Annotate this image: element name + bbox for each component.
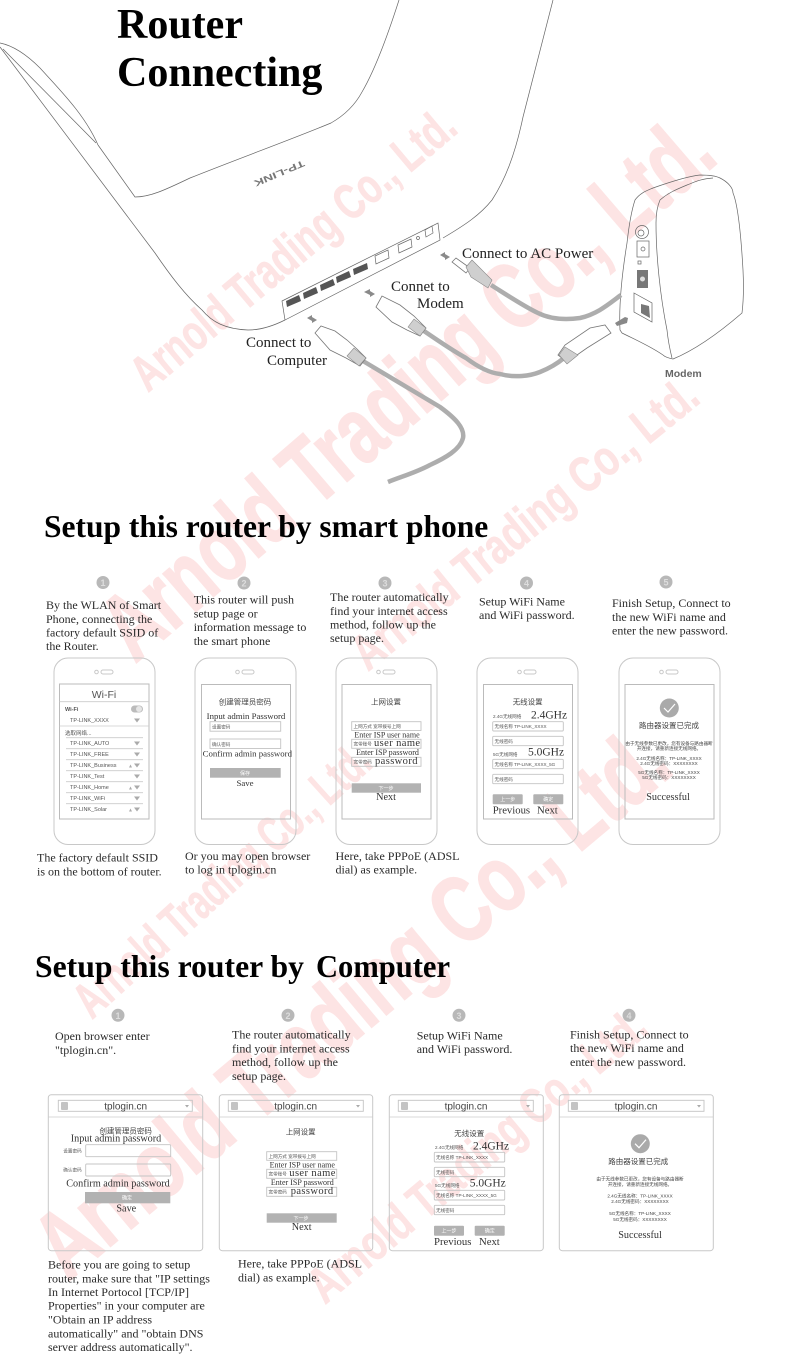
browser window 2: internet setup: tplogin.cn (274, 1102, 317, 1112)
browser window 1: admin password (48, 1095, 203, 1251)
browser window 2: internet setup: 宽带账号 (268, 1170, 287, 1178)
heading: smart phone setup: Setup this router by smart phone (44, 509, 488, 544)
step numbers: computer (112, 1009, 636, 1022)
notes below phones: dial) as example. (336, 863, 417, 877)
browser window 4: setup complete: 2.4G无线密码：XXXXXXXX (611, 1198, 669, 1205)
title: Connecting (117, 50, 322, 96)
browser window 1: admin password: Input admin password (71, 1134, 161, 1145)
step descriptions: phone: the smart phone (194, 634, 270, 648)
phone 4: wireless setup: 确定 (543, 796, 553, 803)
phone 5: setup complete: Successful (646, 792, 690, 803)
phone 1: Wi-Fi list (54, 658, 155, 844)
modem cable and plugs (364, 289, 628, 376)
notes below windows: Properties" in your computer are (48, 1299, 205, 1313)
phone 1: Wi-Fi list: Wi-Fi (65, 707, 79, 713)
browser window 2: internet setup: Next (292, 1222, 312, 1233)
browser window 4: setup complete: 开连接，请重新连接无线网络。 (608, 1181, 672, 1188)
browser window 4: setup complete: 5G无线密码：XXXXXXXX (613, 1216, 667, 1223)
step descriptions: phone: find your internet access (330, 604, 448, 618)
browser window 2: internet setup: Enter ISP user name (270, 1161, 335, 1170)
step descriptions: phone: Phone, connecting the (46, 612, 152, 626)
phone 4: wireless setup: Previous (493, 805, 530, 817)
browser window 1: admin password: 确定 (122, 1194, 132, 1202)
cable labels: Connect to (246, 335, 311, 351)
phone 5: setup complete: 开连接，请重新连接无线网络。 (637, 745, 701, 752)
phone 3: internet setup: 上网设置 (371, 696, 401, 706)
step descriptions: computer: setup page. (232, 1069, 286, 1083)
title (117, 2, 322, 96)
modem caption: Modem (665, 368, 702, 380)
browser window 3: wireless setup: 5G无线网络 (435, 1182, 460, 1189)
step numbers: phone (96, 576, 672, 590)
step descriptions: phone: setup page or (194, 606, 258, 620)
step numbers: phone: 2 (241, 578, 247, 588)
phone 3: internet setup: 宽带密码 (354, 758, 372, 766)
browser window 4: setup complete (559, 1095, 713, 1251)
browser window 3: wireless setup: 2.4G无线网络 (435, 1144, 464, 1151)
browser window 4: setup complete: Successful (618, 1230, 662, 1241)
phone 4: wireless setup: 上一步 (500, 796, 515, 803)
phone 3: internet setup: Enter ISP user name (354, 731, 420, 740)
phone 2: admin password: 创建管理员密码 (219, 696, 272, 706)
browser window 3: wireless setup: 5.0GHz (470, 1178, 506, 1190)
cable labels: Connect to AC Power (462, 246, 593, 262)
phone 5: setup complete: 5G无线名称：TP-LINK_XXXX (638, 769, 700, 776)
notes below phones: Or you may open browser (185, 849, 310, 863)
phone 5: setup complete: 由于无线参数已更改，您有设备与路由器断 (625, 740, 713, 747)
computer cable and plug (307, 315, 463, 482)
phone 4: wireless setup: 无线名称 TP-LINK_XXXX (494, 723, 547, 730)
router illustration (0, 0, 553, 330)
browser window 3: wireless setup: 无线密码 (436, 1207, 455, 1214)
step descriptions: phone: By the WLAN of Smart (46, 598, 162, 612)
notes below phones: The factory default SSID (37, 851, 158, 865)
watermarks: Arnold Trading Co., Ltd. (296, 997, 658, 1313)
step descriptions: computer: enter the new password. (570, 1055, 686, 1069)
phone 3: internet setup: Enter ISP password (356, 748, 419, 757)
phone 2: admin password: Save (236, 778, 254, 788)
phone 1: Wi-Fi list: TP-LINK_AUTO (70, 741, 110, 747)
phone 4: wireless setup (477, 658, 578, 844)
browser window 1: admin password: 创建管理员密码 (99, 1126, 152, 1136)
step descriptions: computer (55, 1027, 689, 1083)
watermarks: Arnold Trading Co., Ltd. (340, 366, 709, 681)
step descriptions: phone: information message to (194, 620, 306, 634)
phone 3: internet setup: 上网方式 宽带拨号上网 (354, 723, 401, 730)
cable labels: Computer (267, 353, 327, 369)
browser window 4: setup complete: 2.4G无线名称：TP-LINK_XXXX (607, 1192, 673, 1200)
browser window 4: setup complete: 5G无线名称：TP-LINK_XXXX (609, 1210, 671, 1217)
notes below phones: Here, take PPPoE (ADSL (336, 849, 459, 863)
browser window 3: wireless setup: 上一步 (441, 1228, 457, 1234)
step numbers: computer: 4 (626, 1011, 632, 1021)
notes below windows: Before you are going to setup (48, 1257, 190, 1271)
step descriptions: phone: This router will push (194, 593, 294, 607)
phone 2: admin password: Input admin Password (207, 711, 286, 721)
phone 3: internet setup: user name (374, 738, 420, 749)
step numbers: phone: 1 (100, 578, 106, 588)
phone 1: Wi-Fi list: TP-LINK_FREE (70, 752, 109, 758)
phone 2: admin password: Confirm admin password (203, 749, 293, 759)
phone 5: setup complete: 2.4G无线名称：TP-LINK_XXXX (636, 755, 702, 762)
browser window 3: wireless setup: 无线设置 (454, 1128, 485, 1138)
cable labels: Modem (417, 296, 464, 312)
phone 4: wireless setup: 无线名称 TP-LINK_XXXX_5G (494, 761, 556, 768)
phone 1: Wi-Fi list: TP-LINK_Home (70, 785, 109, 791)
notes below windows: dial) as example. (238, 1271, 320, 1285)
ethernet port panel (282, 223, 440, 320)
phone 3: internet setup: 下一步 (378, 786, 394, 792)
phone 4: wireless setup: Next (537, 805, 558, 817)
heading: computer setup: Computer (316, 949, 450, 984)
cable labels (246, 246, 593, 369)
browser window 3: wireless setup: 2.4GHz (473, 1141, 509, 1153)
browser window 3: wireless setup: Previous (434, 1236, 471, 1248)
phone 3: internet setup: password (375, 756, 418, 767)
step descriptions: phone: factory default SSID of (46, 626, 158, 640)
phone 4: wireless setup: 2.4G无线网络 (493, 713, 522, 720)
notes below windows (48, 1257, 362, 1354)
step descriptions: computer: method, follow up the (232, 1055, 338, 1069)
heading: computer setup (35, 949, 450, 984)
step descriptions: phone: Setup WiFi Name (479, 595, 565, 609)
browser window 3: wireless setup: 确定 (485, 1228, 495, 1234)
phone 2: admin password: 确认密码 (212, 741, 231, 748)
step descriptions: phone: The router automatically (330, 590, 449, 604)
notes below windows: server address automatically". (48, 1340, 193, 1354)
browser window 4: setup complete: tplogin.cn (615, 1102, 657, 1112)
notes below phones: to log in tplogin.cn (185, 863, 276, 877)
notes below phones (37, 849, 459, 878)
browser window 2: internet setup (219, 1095, 373, 1251)
browser window 3: wireless setup: 无线密码 (436, 1169, 455, 1176)
phone 1: Wi-Fi list: Wi-Fi (92, 689, 116, 701)
phone 4: wireless setup: 无线密码 (494, 738, 513, 745)
step descriptions: computer: Open browser enter (55, 1029, 150, 1043)
phone 1: Wi-Fi list: TP-LINK_XXXX (70, 718, 109, 724)
phone 5: setup complete (619, 658, 720, 844)
browser window 1: admin password: Confirm admin password (66, 1179, 170, 1190)
notes below windows: "Obtain an IP address (48, 1313, 152, 1327)
step descriptions: computer: the new WiFi name and (570, 1041, 684, 1055)
notes below windows: router, make sure that "IP settings (48, 1271, 210, 1285)
phone 4: wireless setup: 无线设置 (513, 696, 543, 706)
watermarks: Arnold Trading Co., Ltd. (119, 97, 467, 401)
power cable and plug (440, 252, 621, 319)
phone 5: setup complete: 5G无线密码：XXXXXXXX (642, 774, 696, 781)
watermarks: Arnold Trading Co., Ltd. (62, 732, 382, 1028)
browser window 2: internet setup: Enter ISP password (271, 1178, 334, 1187)
phone 5: setup complete: 路由器设置已完成 (639, 720, 699, 730)
phone 4: wireless setup: 5.0GHz (528, 747, 564, 759)
title: Router (117, 2, 243, 48)
step numbers: phone: 4 (524, 578, 529, 588)
step descriptions: phone: Finish Setup, Connect to (612, 596, 731, 610)
phone 3: internet setup (336, 658, 437, 844)
browser window 2: internet setup: 上网方式 宽带拨号上网 (268, 1153, 316, 1160)
step descriptions: computer: Setup WiFi Name (417, 1028, 503, 1042)
browser window 4: setup complete: 由于无线参数已更改，您有设备与路由器断 (596, 1176, 684, 1182)
phone 5: setup complete: 2.4G无线密码：XXXXXXXX (640, 760, 698, 767)
browser window 3: wireless setup: 无线名称 TP-LINK_XXXX (436, 1154, 488, 1161)
browser window 2: internet setup: user name (289, 1168, 336, 1179)
phone 2: admin password (195, 658, 296, 844)
step descriptions: computer: Finish Setup, Connect to (570, 1027, 689, 1041)
heading: computer setup: Setup this router by (35, 949, 304, 984)
phone 1: Wi-Fi list: TP-LINK_WiFi (70, 796, 105, 802)
browser window 1: admin password: 确认密码 (63, 1166, 82, 1174)
phone 3: internet setup: Next (376, 792, 396, 803)
browser window 2: internet setup: password (291, 1186, 334, 1197)
step descriptions: phone: the Router. (46, 639, 99, 653)
step descriptions: phone: the new WiFi name and (612, 610, 726, 624)
phone 4: wireless setup: 2.4GHz (531, 710, 567, 722)
phone 1: Wi-Fi list: 选取网络... (65, 729, 92, 737)
phone 1: Wi-Fi list: TP-LINK_Solar (70, 807, 107, 813)
step numbers: computer: 1 (115, 1011, 121, 1021)
notes below windows: automatically" and "obtain DNS (48, 1326, 203, 1340)
step descriptions: phone: enter the new password. (612, 624, 728, 638)
step descriptions: computer: The router automatically (232, 1028, 351, 1042)
step descriptions: phone: and WiFi password. (479, 608, 575, 622)
step numbers: computer: 2 (285, 1011, 291, 1021)
modem illustration (620, 175, 743, 380)
step numbers: phone: 5 (663, 578, 669, 588)
step descriptions: computer: and WiFi password. (417, 1042, 512, 1056)
step descriptions: computer: "tplogin.cn". (55, 1043, 116, 1057)
browser window 3: wireless setup (389, 1095, 543, 1251)
brand mark: TP-LINK (252, 158, 306, 189)
browser window 2: internet setup: 宽带密码 (268, 1188, 287, 1196)
step numbers: phone: 3 (382, 578, 388, 588)
cable labels: Connet to (391, 279, 450, 295)
browser window 3: wireless setup: 无线名称 TP-LINK_XXXX_5G (436, 1192, 497, 1199)
notes below windows: In Internet Portocol [TCP/IP] (48, 1285, 189, 1299)
notes below windows: Here, take PPPoE (ADSL (238, 1257, 362, 1271)
step descriptions: phone: setup page. (330, 631, 384, 645)
browser window 4: setup complete: 路由器设置已完成 (608, 1156, 669, 1166)
notes below phones: is on the bottom of router. (37, 864, 162, 878)
browser window 2: internet setup: 下一步 (293, 1216, 309, 1222)
phone 4: wireless setup: 5G无线网络 (493, 751, 518, 758)
step descriptions: computer: find your internet access (232, 1042, 350, 1056)
step descriptions: phone: method, follow up the (330, 618, 436, 632)
step descriptions: phone (46, 590, 731, 653)
phone 4: wireless setup: 无线密码 (494, 776, 513, 783)
browser window 2: internet setup: 上网设置 (286, 1126, 316, 1136)
browser window 1: admin password: tplogin.cn (104, 1102, 147, 1112)
phone 1: Wi-Fi list: TP-LINK_Test (70, 774, 105, 780)
browser window 3: wireless setup: tplogin.cn (445, 1102, 487, 1112)
browser window 3: wireless setup: Next (479, 1236, 500, 1248)
phone 2: admin password: 设置密码 (212, 724, 231, 730)
phone 1: Wi-Fi list: TP-LINK_Business (70, 763, 117, 769)
step numbers: computer: 3 (456, 1011, 462, 1021)
browser window 1: admin password: 设置密码 (63, 1148, 82, 1154)
browser window 1: admin password: Save (116, 1203, 137, 1214)
phone 2: admin password: 保存 (240, 770, 250, 777)
phone 3: internet setup: 宽带账号 (354, 740, 372, 748)
